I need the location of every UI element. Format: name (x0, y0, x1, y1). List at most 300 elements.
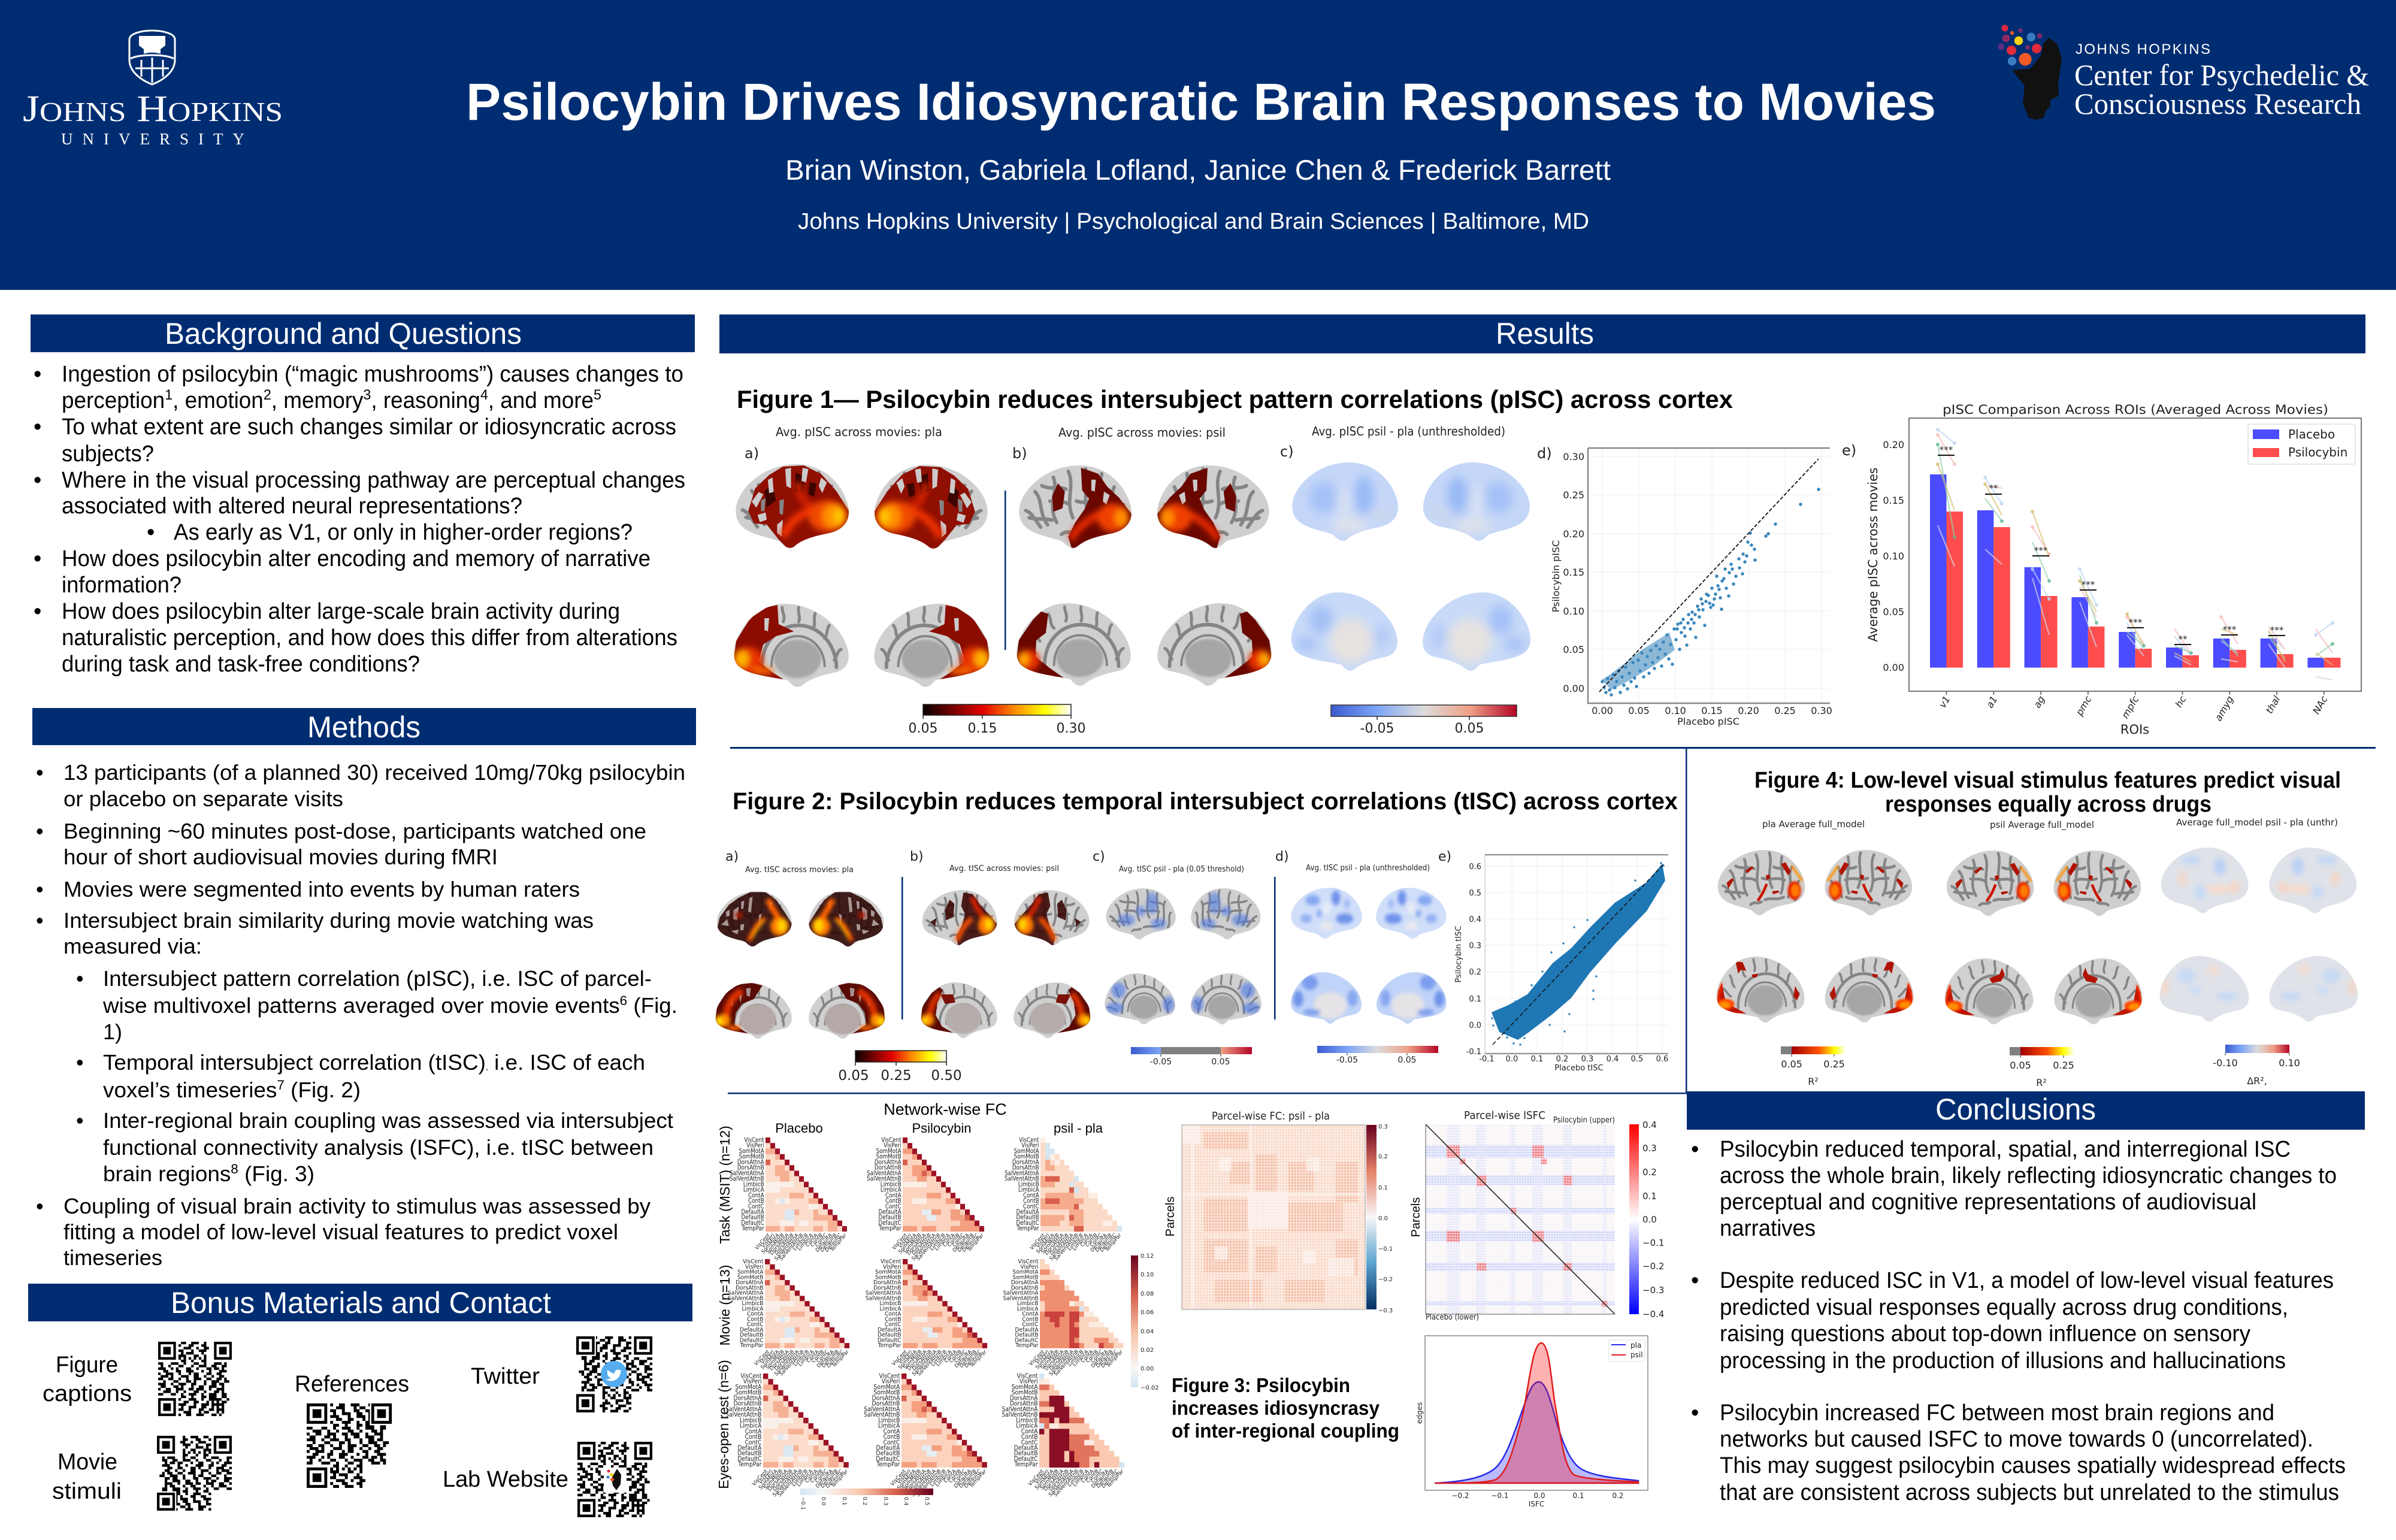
scatter plot: figure 1d placebo vs psilocybin pISC: Psilocybin pISC (1550, 540, 1562, 612)
heatmaps: task row: VisPeri (761, 1232, 776, 1250)
heatmap: parcel-wise ISFC: Psilocybin (upper) (1553, 1116, 1615, 1125)
heatmap: parcel-wise FC difference (1164, 1110, 1393, 1314)
colorbar: psilocybin R squared: 0.05 (2010, 1060, 2031, 1071)
panel: figure 1 (733, 385, 2361, 737)
colorbar: network FC difference: −0.02 (1140, 1385, 1159, 1391)
heatmaps: task row (730, 1137, 1123, 1262)
brain maps: figure 2d unthresholded difference (1275, 849, 1447, 1024)
scatter plot: figure 1d placebo vs psilocybin pISC: 0.05 (1563, 644, 1584, 655)
heatmap: parcel-wise ISFC: 0.0 (1642, 1214, 1657, 1225)
heatmap: parcel-wise ISFC: −0.3 (1642, 1285, 1664, 1296)
text block: background bullets: , emotion (173, 388, 264, 413)
scatter plot: figure 1d placebo vs psilocybin pISC: 0.25 (1563, 489, 1584, 501)
heatmap: parcel-wise ISFC: −0.1 (1642, 1238, 1664, 1248)
axis labels: ROIs (2120, 722, 2149, 737)
heatmap: parcel-wise ISFC: Parcels (1409, 1197, 1423, 1237)
scatter plot: figure 1d placebo vs psilocybin pISC: 0.00 (1563, 683, 1584, 694)
heading: bonus materials (28, 1284, 692, 1321)
logo: Center for Psychedelic and Consciousness Research: Center for Psychedelic & (2074, 58, 2369, 92)
text block: background bullets: , reasoning (371, 388, 480, 413)
axis labels: a1 (1984, 694, 1999, 710)
scatter plot: figure 1d placebo vs psilocybin pISC (1537, 445, 1832, 727)
caption: figure 3: of inter-regional coupling (1172, 1420, 1399, 1442)
heatmaps: task row: SomMotA (739, 1148, 764, 1155)
text block: methods bullets: • (36, 877, 44, 901)
heatmap: parcel-wise FC difference: 0.3 (1378, 1124, 1388, 1130)
heatmap: parcel-wise FC difference: −0.2 (1378, 1276, 1393, 1283)
scatter plot: figure 1d placebo vs psilocybin pISC: 0.10 (1563, 606, 1584, 617)
heatmaps: task row: DefaultC (824, 1232, 843, 1254)
density plot: ISFC distribution: 0.1 (1572, 1491, 1584, 1500)
heading: methods (32, 708, 696, 745)
axis labels (1866, 439, 2330, 737)
colorbar: placebo R squared: 0.25 (1823, 1058, 1845, 1070)
heatmap: parcel-wise FC difference: 0.2 (1378, 1154, 1388, 1160)
scatter plot: figure 1d placebo vs psilocybin pISC: d) (1537, 445, 1552, 462)
divider between panels a and b (1005, 491, 1006, 650)
caption: figure 3: Figure 3: Psilocybin (1172, 1374, 1350, 1396)
colorbar: thresholded difference: 0.05 (1211, 1057, 1230, 1067)
significance markers: *** (2082, 579, 2095, 590)
label: figure captions (43, 1353, 132, 1406)
heading: background and questions: Background and Questions (165, 317, 522, 350)
text block: methods bullets: brain regions (103, 1161, 228, 1186)
text block: conclusion bullets: raising questions about top-down influence on sensory (1720, 1321, 2250, 1347)
text block: background bullets (34, 362, 685, 677)
row labels: Eyes-open rest (n=6) (716, 1360, 731, 1489)
colorbar: hot 0.05 to 0.50: 0.05 (838, 1068, 869, 1084)
colorbar: delta R squared: 0.10 (2279, 1057, 2300, 1069)
row labels (716, 1125, 733, 1489)
colorbar: placebo R squared: 0.05 (1781, 1058, 1802, 1070)
panel: figure 2 (715, 788, 1678, 1084)
significance markers: *** (1940, 444, 1953, 455)
text block: conclusion bullets: • (1691, 1137, 1699, 1162)
label: twitter: Twitter (471, 1364, 540, 1389)
logo: Center for Psychedelic and Consciousness Research (1998, 25, 2369, 120)
text block: background bullets: 4 (480, 387, 488, 403)
text block: background bullets: • (34, 415, 41, 440)
scatter plot: figure 2e placebo vs psilocybin tISC: 0.5 (1631, 1055, 1643, 1064)
bars: psilocybin (1947, 512, 2340, 668)
heatmap: parcel-wise FC difference: 0.0 (1378, 1215, 1388, 1222)
scatter plot: figure 2e placebo vs psilocybin tISC: 0.1 (1469, 995, 1481, 1004)
significance markers: ** (2178, 634, 2188, 645)
heatmaps: task row: TempPar (741, 1226, 764, 1232)
heatmap: parcel-wise ISFC: −0.2 (1642, 1261, 1664, 1272)
scatter plot: figure 2e placebo vs psilocybin tISC: 0.1 (1531, 1055, 1543, 1064)
panel: figure 3 (716, 1100, 1664, 1510)
brain maps: figure 1a pISC placebo: Avg. pISC across movies: pla (776, 425, 942, 439)
caption: figure 3: increases idiosyncrasy (1172, 1397, 1380, 1419)
QR code: lab website (576, 1441, 654, 1518)
text block: methods bullets: • (76, 966, 84, 991)
text block: background bullets: 3 (363, 387, 371, 403)
bar chart: figure 1e pISC by ROI (1842, 403, 2361, 737)
heatmaps: task row: SalVentAttnB (779, 1232, 804, 1262)
text block: methods bullets: (Fig. 3) (238, 1161, 314, 1186)
colorbar: hot 0.05 to 0.50: 0.25 (881, 1068, 912, 1084)
heading: figure 4 title: responses equally across drugs (1885, 792, 2212, 817)
text block: conclusion bullets (1691, 1137, 2346, 1505)
heatmaps: task row: SalVentAttnB (730, 1176, 764, 1182)
heading: conclusions: Conclusions (1935, 1093, 2096, 1126)
divider above figure 3 (728, 1093, 1687, 1094)
brain maps: figure 1c difference (1280, 424, 1530, 671)
heatmaps: movie row (728, 1258, 1124, 1378)
axis labels: ag (2031, 694, 2047, 710)
text block: methods bullets: Intersubject brain similarity during movie watching was (63, 908, 594, 933)
text block: conclusion bullets: narratives (1720, 1216, 1816, 1241)
label: figure captions: captions (43, 1381, 132, 1406)
brain maps: figure 2d unthresholded difference: Avg. tISC psil - pla (unthresholded) (1306, 864, 1430, 873)
scatter plot: figure 2e placebo vs psilocybin tISC: Psilocybin tISC (1454, 926, 1463, 982)
heading: results (719, 314, 2365, 353)
text block: methods bullets: • (76, 1050, 84, 1075)
QR code: movie stimuli (156, 1435, 233, 1512)
row labels: Movie (n=13) (717, 1265, 733, 1345)
density plot: ISFC distribution: edges (1415, 1402, 1424, 1424)
text block: methods bullets: 1) (103, 1019, 122, 1044)
text block: background bullets: As early as V1, or only in higher-order regions? (174, 520, 633, 545)
heatmaps: task row: ContB (748, 1197, 764, 1205)
text block: methods bullets: • (36, 760, 44, 785)
text block: conclusion bullets: Psilocybin reduced temporal, spatial, and interregional ISC (1720, 1137, 2291, 1162)
brain maps: figure 4 difference: Average full_model psil - pla (unthr) (2176, 817, 2338, 828)
significance markers (1938, 444, 2285, 645)
heatmaps: task row: DorsAttnB (774, 1232, 795, 1257)
heading: figure 4 title: Figure 4: Low-level visual stimulus features predict visual (1754, 768, 2341, 793)
label: figure captions: Figure (56, 1353, 118, 1378)
text block: methods bullets: voxel’s timeseries (103, 1078, 273, 1102)
heatmap: parcel-wise ISFC: Parcel-wise ISFC (1464, 1109, 1545, 1122)
text block: conclusion bullets: networks but caused ISFC to move towards 0 (uncorrelated). (1720, 1427, 2313, 1452)
text block: background bullets: during task and task-free conditions? (62, 652, 420, 677)
density plot: ISFC distribution (1415, 1336, 1648, 1508)
scatter plot: figure 2e placebo vs psilocybin tISC: 0.6 (1656, 1055, 1668, 1064)
QR code: references (305, 1402, 394, 1489)
heatmaps: task row: SomMotB (739, 1154, 764, 1160)
scatter plot: figure 1d placebo vs psilocybin pISC: Placebo pISC (1677, 716, 1739, 727)
axis labels: Average pISC across movies (1866, 467, 1880, 642)
bars: placebo (1930, 474, 2324, 668)
colorbar: network FC: 0.0 (820, 1497, 826, 1506)
text block: conclusion bullets: that are consistent across subjects but unrelated to the stimulus (1720, 1480, 2339, 1505)
heading: bonus materials: Bonus Materials and Contact (171, 1286, 551, 1320)
colorbar: coolwarm -0.05 to 0.05 (1331, 705, 1517, 736)
text block: background bullets: • (34, 546, 41, 571)
text block: methods bullets: timeseries (63, 1245, 162, 1270)
text block: methods bullets: • (76, 1108, 84, 1133)
density plot: ISFC distribution: −0.1 (1491, 1491, 1509, 1500)
heatmaps: task row: LimbicB (792, 1232, 809, 1252)
header banner (0, 0, 2396, 290)
heatmaps: task row: VisCent (744, 1137, 764, 1144)
heatmap: parcel-wise FC difference: −0.1 (1378, 1246, 1393, 1252)
column labels: Psilocybin (912, 1121, 972, 1136)
brain maps: figure 1a pISC placebo: a) (745, 445, 759, 462)
brain maps: figure 2c thresholded difference: c) (1093, 849, 1105, 864)
divider between figure 2 and figure 4 (1686, 748, 1687, 1094)
heading: figure 4 title (1754, 768, 2341, 817)
panel: background and questions (31, 314, 695, 677)
text block: conclusion bullets: Despite reduced ISC in V1, a model of low-level visual features (1720, 1268, 2334, 1293)
colorbar: hot 0.05 to 0.30: 0.30 (1057, 721, 1085, 736)
colorbar: hot 0.05 to 0.30: 0.15 (968, 721, 997, 736)
density plot: ISFC distribution: −0.2 (1451, 1491, 1469, 1500)
scatter plot: figure 2e placebo vs psilocybin tISC: 0.0 (1506, 1055, 1518, 1064)
text block: background bullets: information? (62, 573, 181, 598)
row labels: Task (MSIT) (n=12) (717, 1125, 733, 1244)
significance markers: ** (1989, 483, 1998, 494)
brain maps: figure 1b pISC psilocybin (1012, 425, 1273, 686)
legend: Placebo (2288, 427, 2335, 441)
panel: methods (32, 708, 696, 1270)
brain maps: figure 4 difference (2160, 817, 2358, 1022)
brain maps: figure 2a tISC placebo: Avg. tISC across movies: pla (745, 866, 854, 875)
scatter plot: figure 2e placebo vs psilocybin tISC: 0.3 (1581, 1055, 1593, 1064)
bar chart: figure 1e pISC by ROI: e) (1842, 442, 1856, 459)
logo: Johns Hopkins University (23, 31, 283, 148)
heatmaps: task row: DorsAttnA (769, 1232, 790, 1257)
heatmaps: task row: VisCent (754, 1232, 772, 1252)
density plot: ISFC distribution: 0.0 (1533, 1491, 1545, 1500)
text block: methods bullets: • (36, 819, 44, 843)
heading: background and questions (31, 314, 695, 352)
text block: methods bullets: 6 (620, 993, 627, 1008)
brain maps: figure 2d unthresholded difference: d) (1275, 849, 1289, 864)
brain maps: figure 4 psilocybin model (1945, 819, 2142, 1024)
heatmap: parcel-wise FC difference: 0.1 (1378, 1185, 1388, 1191)
brain maps: figure 2c thresholded difference (1093, 849, 1261, 1024)
scatter plot: figure 2e placebo vs psilocybin tISC: 0.0 (1469, 1021, 1481, 1030)
colorbar: unthresholded difference: 0.05 (1397, 1055, 1417, 1065)
divider under figure 1 (730, 747, 2376, 749)
text block: background bullets: • (147, 520, 155, 545)
icon: university shield (129, 31, 175, 84)
text block: background bullets: How does psilocybin alter large-scale brain activity during (62, 599, 620, 624)
heading: conclusions (1687, 1091, 2365, 1130)
text block: methods bullets: Beginning ~60 minutes post-dose, participants watched one (63, 819, 646, 843)
text block: methods bullets: 8 (231, 1161, 238, 1176)
scatter plot: figure 2e placebo vs psilocybin tISC (1438, 849, 1668, 1073)
heatmap: parcel-wise ISFC: 0.2 (1642, 1167, 1657, 1178)
brain maps: figure 2b tISC psilocybin: b) (910, 849, 924, 864)
logo: Center for Psychedelic and Consciousness Research: Consciousness Research (2074, 87, 2361, 120)
colorbar: network FC difference (1131, 1253, 1159, 1391)
heatmap: parcel-wise FC difference: Parcels (1164, 1197, 1177, 1236)
colorbar: unthresholded difference (1317, 1046, 1438, 1065)
colorbar: network FC difference: 0.12 (1140, 1253, 1154, 1260)
heatmaps: task row: LimbicA (743, 1187, 764, 1194)
divider between panels c and d (1274, 877, 1276, 1019)
logo: Johns Hopkins University: UNIVERSITY (61, 130, 244, 148)
text block: conclusion bullets: • (1691, 1268, 1699, 1293)
label: references: References (295, 1372, 409, 1397)
scatter plot: figure 2e placebo vs psilocybin tISC: -0.1 (1466, 1048, 1481, 1057)
icon: head silhouette with coloured dots (1998, 25, 2062, 120)
heatmaps: task row: LimbicB (743, 1181, 764, 1188)
colorbar: thresholded difference: -0.05 (1150, 1057, 1172, 1067)
axis labels: 0.05 (1883, 606, 1904, 618)
scatter plot: figure 2e placebo vs psilocybin tISC: 0.2 (1556, 1055, 1568, 1064)
colorbar: placebo R squared: R² (1808, 1076, 1819, 1087)
bar chart: figure 1e pISC by ROI: pISC Comparison Across ROIs (Averaged Across Movies) (1943, 403, 2328, 417)
colorbar: network FC (800, 1488, 933, 1510)
scatter plot: figure 2e placebo vs psilocybin tISC: Placebo tISC (1554, 1064, 1604, 1073)
colorbar: network FC: 0.5 (924, 1497, 930, 1505)
column labels (775, 1121, 1103, 1136)
colorbar: psilocybin R squared (2010, 1047, 2074, 1088)
scatter plot: figure 1d placebo vs psilocybin pISC: 0.30 (1563, 451, 1584, 462)
text block: background bullets: • (34, 468, 41, 493)
text block: methods bullets: (Fig. (627, 993, 677, 1018)
text block: conclusion bullets: This may suggest psilocybin causes spatially widespread effects (1720, 1453, 2346, 1478)
colorbar: network FC difference: 0.08 (1140, 1291, 1154, 1297)
brain maps: figure 1b pISC psilocybin: b) (1012, 445, 1027, 462)
brain maps: figure 4 placebo model: pla Average full_model (1762, 819, 1865, 830)
heatmaps: task row: ContC (748, 1203, 764, 1210)
brain maps: figure 2c thresholded difference: Avg. tISC psil - pla (0.05 threshold) (1119, 865, 1244, 874)
text block: methods bullets: (Fig. 2) (285, 1078, 361, 1102)
heatmaps: task row: TempPar (829, 1232, 848, 1254)
axis labels: 0.15 (1883, 495, 1904, 506)
significance markers: *** (2129, 617, 2143, 628)
column labels: psil - pla (1054, 1121, 1103, 1136)
colorbar: placebo R squared (1781, 1046, 1846, 1087)
heatmaps: task row: DefaultA (741, 1209, 764, 1216)
colorbar: hot 0.05 to 0.50: 0.50 (931, 1068, 962, 1084)
column labels: Placebo (775, 1121, 823, 1136)
colorbar: unthresholded difference: -0.05 (1336, 1055, 1358, 1065)
colorbar: delta R squared: ΔR², (2247, 1075, 2267, 1087)
brain maps: figure 2b tISC psilocybin: Avg. tISC across movies: psil (949, 864, 1059, 873)
density plot: ISFC distribution: ISFC (1529, 1500, 1544, 1508)
panel: figure 4 (1717, 768, 2358, 1088)
scatter plot: figure 2e placebo vs psilocybin tISC: e) (1438, 849, 1451, 864)
scatter plot: figure 2e placebo vs psilocybin tISC: 0.6 (1469, 863, 1481, 872)
heatmaps: task row: DefaultC (741, 1220, 764, 1227)
text block: background bullets: 5 (594, 387, 601, 403)
colorbar: network FC: 0.1 (841, 1497, 847, 1505)
text block: methods bullets: fitting a model of low-level visual features to predict voxel (63, 1220, 618, 1244)
scatter plot: figure 2e placebo vs psilocybin tISC: 0.5 (1469, 889, 1481, 898)
divider between panels a and b (901, 877, 903, 1019)
significance markers: *** (2223, 624, 2237, 635)
scatter plot: figure 1d placebo vs psilocybin pISC: 0.20 (1738, 705, 1759, 716)
heatmaps: task row: ContA (748, 1192, 764, 1199)
colorbar: thresholded difference (1131, 1047, 1252, 1067)
brain maps: figure 2b tISC psilocybin (910, 849, 1091, 1038)
heatmap: parcel-wise ISFC: −0.4 (1642, 1309, 1664, 1320)
brain maps: figure 1b pISC psilocybin: Avg. pISC across movies: psil (1058, 425, 1226, 440)
colorbar: network FC difference: 0.02 (1140, 1347, 1154, 1354)
text block: methods bullets: Intersubject pattern correlation (pISC), i.e. ISC of parcel- (103, 966, 652, 991)
axis labels: mpfc (2119, 694, 2141, 721)
heatmaps: task row: ContA (805, 1232, 819, 1249)
heatmap: parcel-wise ISFC (1409, 1109, 1664, 1322)
heading: figure 1 title: Figure 1— Psilocybin reduces intersubject pattern correlations (pISC) across cortex (737, 385, 1734, 413)
text block: methods bullets (36, 760, 685, 1270)
axis labels: hc (2173, 694, 2189, 709)
text block: methods bullets: functional connectivity analysis (ISFC), i.e. tISC between (103, 1135, 654, 1160)
scatter plot: figure 1d placebo vs psilocybin pISC: 0.30 (1811, 705, 1832, 716)
heatmap: parcel-wise ISFC: 0.1 (1642, 1191, 1657, 1202)
text block: methods bullets: Inter-regional brain coupling was assessed via intersubject (103, 1108, 673, 1133)
text block: background bullets: associated with altered neural representations? (62, 494, 522, 519)
axis labels: thal (2264, 694, 2283, 716)
heatmap: parcel-wise FC difference: −0.3 (1378, 1308, 1393, 1314)
text block: conclusion bullets: predicted visual responses equally across drug conditions, (1720, 1295, 2288, 1320)
axis labels: pmc (2073, 694, 2094, 718)
scatter plot: figure 2e placebo vs psilocybin tISC: 0.4 (1607, 1055, 1618, 1064)
label: movie stimuli: stimuli (52, 1479, 122, 1504)
heading: results: Results (1496, 317, 1594, 350)
authors: Brian Winston, Gabriela Lofland, Janice Chen & Frederick Barrett (785, 154, 1611, 186)
logo: Center for Psychedelic and Consciousness Research: JOHNS HOPKINS (2076, 41, 2210, 58)
text block: methods bullets: • (36, 908, 44, 933)
subject paired lines (1938, 429, 2333, 680)
heatmaps: task row: DorsAttnA (737, 1159, 764, 1166)
panel: bonus materials and contact (28, 1284, 692, 1518)
heatmap: parcel-wise ISFC: 0.3 (1642, 1143, 1657, 1154)
brain maps: figure 4 psilocybin model: psil Average full_model (1990, 819, 2094, 831)
colorbar: delta R squared (2213, 1045, 2300, 1087)
heading: network-wise FC: Network-wise FC (884, 1100, 1007, 1118)
colorbar: network FC: 0.4 (903, 1497, 909, 1506)
logo: Johns Hopkins University: JOHNS HOPKINS (23, 89, 283, 129)
text block: background bullets: • (34, 362, 41, 387)
brain maps: figure 2a tISC placebo: a) (725, 849, 739, 864)
text block: methods bullets: • (36, 1194, 44, 1218)
caption: figure 3 (1172, 1374, 1399, 1442)
text block: background bullets: 2 (264, 387, 271, 403)
text block: background bullets: naturalistic perception, and how does this differ from alterations (62, 625, 677, 651)
significance markers: *** (2270, 625, 2284, 636)
heatmaps: task row: DorsAttnB (737, 1164, 764, 1172)
heatmap: parcel-wise ISFC: Placebo (lower) (1426, 1313, 1479, 1322)
text block: conclusion bullets: Psilocybin increased FC between most brain regions and (1720, 1400, 2274, 1426)
brain maps: figure 2a tISC placebo (715, 849, 886, 1039)
heatmaps: task row: SalVentAttnA (730, 1170, 764, 1177)
text block: methods bullets: Movies were segmented into events by human raters (63, 877, 580, 901)
text block: background bullets: How does psilocybin alter encoding and memory of narrative (62, 546, 651, 571)
axis labels: NAc (2310, 694, 2330, 716)
text block: methods bullets: 7 (277, 1078, 285, 1093)
heatmaps: task row: SomMotA (761, 1232, 780, 1255)
text block: methods bullets: or placebo on separate visits (63, 786, 343, 811)
colorbar: network FC difference: 0.00 (1140, 1366, 1154, 1372)
colorbar: network FC: 0.2 (861, 1497, 867, 1505)
axis labels: v1 (1937, 694, 1952, 710)
text block: conclusion bullets: processing in the production of illusions and hallucinations (1720, 1348, 2286, 1373)
scatter plot: figure 2e placebo vs psilocybin tISC: 0.2 (1469, 968, 1481, 977)
colorbar: psilocybin R squared: R² (2036, 1077, 2047, 1088)
heatmaps: task row: DefaultB (741, 1214, 764, 1221)
text block: methods bullets: wise multivoxel patterns averaged over movie events (103, 993, 609, 1018)
text block: conclusion bullets: perceptual and cognitive representations of audiovisual (1720, 1190, 2256, 1215)
legend (2248, 424, 2355, 464)
colorbar: network FC: −0.1 (800, 1497, 806, 1510)
colorbar: network FC: 0.3 (882, 1497, 888, 1505)
brain maps: figure 1a pISC placebo (733, 425, 991, 687)
text block: methods bullets: Temporal intersubject correlation (tISC) , i.e. ISC of each (103, 1050, 645, 1075)
scatter plot: figure 1d placebo vs psilocybin pISC: 0.05 (1628, 705, 1650, 716)
legend: pla and psil: psil (1630, 1351, 1643, 1359)
heatmap: parcel-wise FC difference: Parcel-wise FC: psil - pla (1212, 1110, 1330, 1123)
scatter plot: figure 2e placebo vs psilocybin tISC: -0.1 (1479, 1055, 1495, 1064)
text block: background bullets: • (34, 599, 41, 624)
